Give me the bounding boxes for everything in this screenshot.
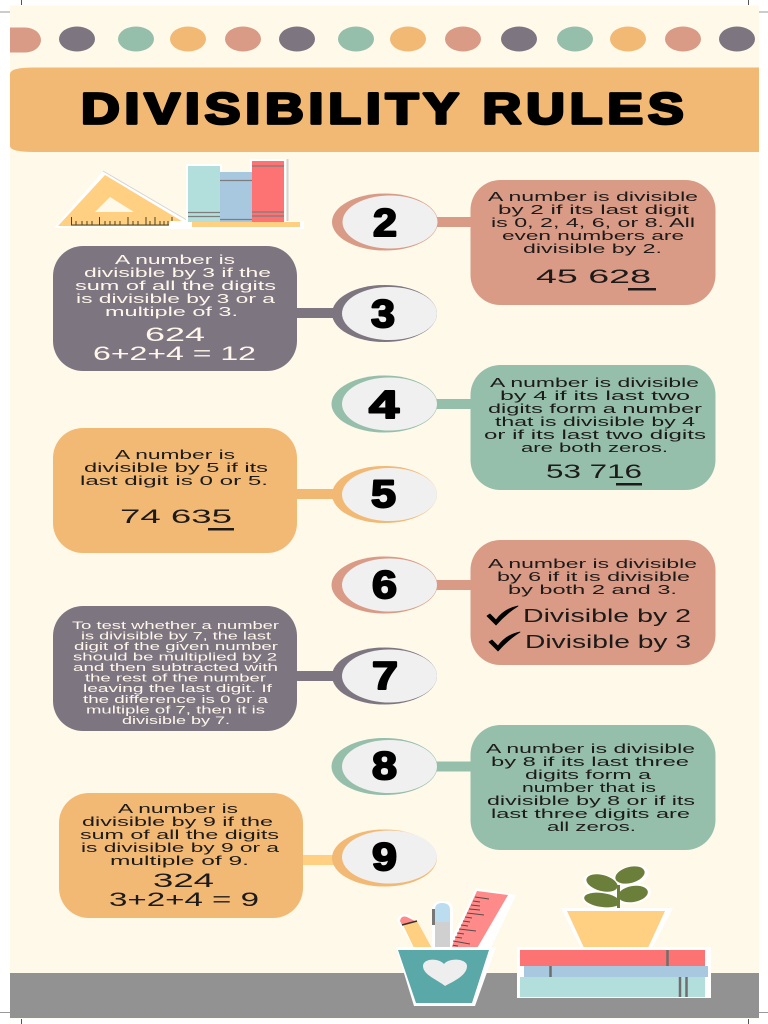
node: number 9: 9 xyxy=(372,836,397,879)
node: number 7 xyxy=(297,648,437,704)
panel: rule 4: 53 716 xyxy=(546,462,642,483)
icon: pencil cup xyxy=(396,888,516,1006)
panel: rule 2 xyxy=(470,180,716,305)
node: number 3 xyxy=(297,285,437,342)
node: number 8: 8 xyxy=(372,745,397,788)
icon: set square ruler xyxy=(54,171,197,228)
panel: rule 3: divisible by 3 if the xyxy=(84,265,271,280)
panel: rule 9: sum of all the digits xyxy=(80,827,280,842)
panel: rule 9: divisible by 9 if the xyxy=(82,814,273,829)
panel: rule 8: all zeros. xyxy=(547,819,636,834)
panel: rule 5 xyxy=(53,428,297,553)
panel: rule 7: the rest of the number xyxy=(85,672,267,684)
node: number 7: 7 xyxy=(372,655,398,698)
node: number 8 xyxy=(332,738,474,795)
node: number 5 xyxy=(297,466,437,523)
panel: rule 7: To test whether a number xyxy=(72,620,280,632)
icon: potted plant on books xyxy=(517,862,711,998)
panel: rule 8: A number is divisible xyxy=(486,741,695,756)
node: number 4: 4 xyxy=(369,384,399,427)
node: number 6: 6 xyxy=(372,564,397,607)
panel: rule 3 xyxy=(53,246,297,371)
panel: rule 2: even numbers are xyxy=(502,228,684,243)
panel: rule 9: A number is xyxy=(118,801,239,816)
icon: check mark xyxy=(487,606,518,625)
panel: rule 7: divisible by 7. xyxy=(122,715,230,727)
panel: rule 7: is divisible by 7, the last xyxy=(81,630,271,642)
panel: rule 8: divisible by 8 or if its xyxy=(487,793,696,808)
panel: rule 4: by 4 if its last two xyxy=(500,388,690,403)
panel: rule 3: sum of all the digits xyxy=(75,278,277,293)
panel: rule 4: that is divisible by 4 xyxy=(495,414,695,429)
panel: rule 7: and then subtracted with xyxy=(73,662,278,674)
title: DIVISIBILITY RULES xyxy=(81,85,684,133)
panel: rule 5: divisible by 5 if its xyxy=(84,460,269,475)
title banner xyxy=(10,68,759,152)
panel: rule 7: should be multiplied by 2 xyxy=(73,652,277,664)
panel: rule 4: digits form a number xyxy=(488,401,703,416)
panel: rule 8: digits form a xyxy=(525,767,652,782)
panel: rule 8: last three digits are xyxy=(491,806,690,821)
panel: rule 7: multiple of 7, then it is xyxy=(86,704,266,716)
panel: rule 5: last digit is 0 or 5. xyxy=(80,473,268,488)
panel: rule 4: are both zeros. xyxy=(521,440,668,455)
panel: rule 5: A number is xyxy=(115,447,236,462)
panel: rule 8: number that is xyxy=(522,780,657,795)
panel: rule 3: is divisible by 3 or a xyxy=(76,291,276,306)
panel: rule 4 xyxy=(470,365,716,490)
node: number 9 xyxy=(303,830,437,886)
panel: rule 3: 6+2+4 = 12 xyxy=(93,344,256,365)
panel: rule 6: by 6 if it is divisible xyxy=(497,569,690,584)
panel: rule 4: A number is divisible xyxy=(490,375,699,390)
panel: rule 2: 45 628 xyxy=(536,267,651,288)
panel: rule 2: divisible by 2. xyxy=(523,241,662,256)
node: number 3: 3 xyxy=(371,293,395,336)
panel: rule 7: leaving the last digit. If xyxy=(83,683,274,695)
panel: rule 2: A number is divisible xyxy=(488,189,698,204)
panel: rule 9: 324 xyxy=(153,871,215,892)
panel: rule 9: is divisible by 9 or a xyxy=(81,840,280,855)
panel: rule 6: by both 2 and 3. xyxy=(508,582,677,597)
panel: rule 3: 624 xyxy=(145,325,206,346)
node: number 6 xyxy=(332,556,474,614)
node: number 2: 2 xyxy=(373,202,397,245)
panel: rule 3: multiple of 3. xyxy=(105,304,238,319)
panel: rule 4: or if its last two digits xyxy=(484,427,707,442)
panel: rule 7: the difference is 0 or a xyxy=(83,694,269,706)
panel: rule 6: Divisible by 2 xyxy=(523,606,691,626)
panel: rule 8: by 8 if its last three xyxy=(491,754,689,769)
panel: rule 2: by 2 if its last digit xyxy=(498,202,690,217)
panel: rule 6: Divisible by 3 xyxy=(525,632,691,652)
panel: rule 2: is 0, 2, 4, 6, or 8. All xyxy=(491,215,695,230)
panel: rule 9: multiple of 9. xyxy=(110,853,249,868)
panel: rule 3: A number is xyxy=(115,252,236,267)
node: number 4 xyxy=(332,376,474,432)
panel: rule 5: 74 635 xyxy=(120,507,232,528)
panel: rule 9 xyxy=(59,793,303,918)
panel: rule 7 xyxy=(53,606,297,731)
panel: rule 8 xyxy=(470,725,716,850)
panel: rule 6 xyxy=(470,540,716,665)
decorative dots row xyxy=(10,26,755,52)
panel: rule 7: digit of the given number xyxy=(74,641,279,653)
panel: rule 6: A number is divisible xyxy=(488,556,697,571)
node: number 2 xyxy=(332,194,474,250)
panel: rule 9: 3+2+4 = 9 xyxy=(109,890,259,911)
icon: check mark xyxy=(489,632,520,651)
node: number 5: 5 xyxy=(371,473,396,516)
icon: books on shelf xyxy=(168,159,304,229)
